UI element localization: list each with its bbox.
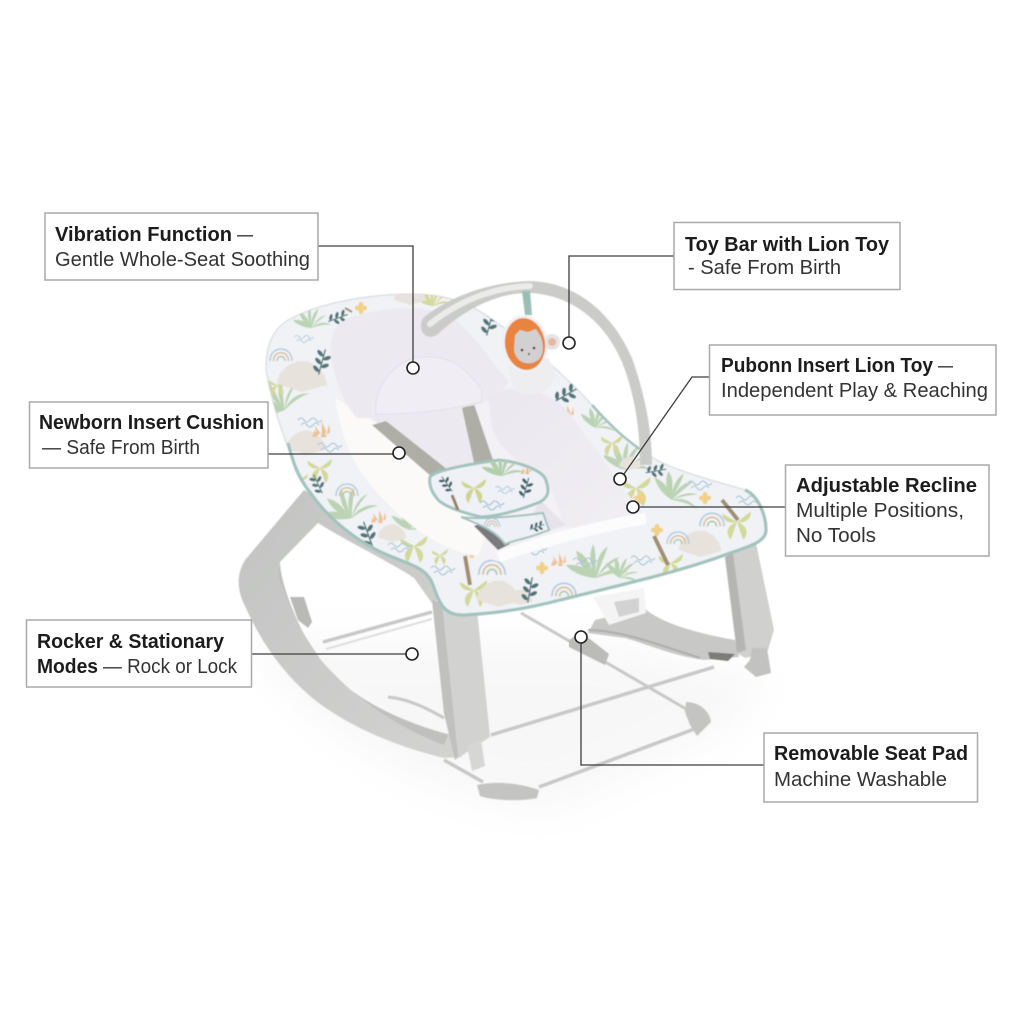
- lion toy: [498, 291, 560, 394]
- leader line: [640, 506, 785, 508]
- box: [30, 402, 268, 468]
- toy hanging strap: [522, 291, 532, 315]
- seat inner shade: [530, 500, 566, 532]
- rocker inner face: [246, 562, 448, 745]
- marker: [614, 473, 626, 485]
- callout: newborn insert cushion: [30, 402, 405, 468]
- label text: Adjustable Recline: [796, 475, 977, 497]
- label text: Toy Bar with Lion Toy: [685, 234, 890, 256]
- marker: [563, 337, 575, 349]
- lion mane: [502, 315, 548, 373]
- description: Multiple Positions,: [796, 500, 964, 522]
- label text: Removable Seat Pad: [774, 743, 968, 765]
- lion eyes and nose: [521, 347, 535, 355]
- label text: Newborn Insert Cushion: [39, 412, 264, 434]
- description: Machine Washable: [774, 769, 947, 791]
- box: [26, 620, 252, 687]
- left side cushion: [335, 398, 486, 556]
- callout: removable seat pad: [575, 631, 978, 802]
- seat white base: [497, 513, 647, 562]
- product: infant rocker seat: [239, 281, 774, 800]
- marker: [407, 362, 419, 374]
- headrest: [331, 308, 509, 418]
- harness strap center: [462, 404, 493, 467]
- newborn insert cushion: [331, 308, 647, 562]
- leader line: [268, 453, 393, 455]
- marker: [627, 501, 639, 513]
- toy bar: [421, 281, 652, 465]
- box: [786, 465, 989, 556]
- crotch pad print: [484, 518, 546, 534]
- marker: [575, 631, 587, 643]
- left rocker: [239, 490, 462, 758]
- bar highlight: [430, 286, 530, 324]
- headrest inner pad: [376, 357, 482, 414]
- leader line: [569, 256, 674, 337]
- callout: adjustable recline: [627, 465, 989, 556]
- front base foot: [477, 783, 539, 800]
- back base foot: [685, 702, 711, 736]
- floor shadow: [250, 640, 770, 809]
- seat pad: [246, 285, 766, 615]
- front foot clip: [467, 740, 485, 771]
- leader line: [624, 377, 709, 474]
- right side cushion: [488, 389, 644, 528]
- fabric binding right edge: [592, 405, 650, 456]
- dash: —: [237, 224, 253, 246]
- description: Independent Play & Reaching: [721, 380, 988, 402]
- fabric binding lower edge: [288, 443, 766, 615]
- description: — Safe From Birth: [42, 437, 200, 459]
- callout: toy bar with lion toy: [563, 222, 900, 349]
- right back rocker: [588, 608, 739, 660]
- marker: [393, 447, 405, 459]
- box: [710, 345, 996, 415]
- base rods: [323, 612, 714, 787]
- description second line: No Tools: [796, 525, 876, 547]
- control box: [593, 588, 646, 625]
- dash: —: [938, 355, 953, 377]
- jungle print: [246, 285, 760, 607]
- label text: Vibration Function: [55, 224, 232, 246]
- rocker frame: [239, 490, 774, 800]
- box: [45, 213, 318, 280]
- lower crotch pad: [461, 513, 549, 544]
- center back panel: [368, 398, 497, 480]
- leader line: [318, 246, 413, 362]
- callout: rocker and stationary modes: [26, 620, 418, 687]
- left rocker brace: [290, 597, 312, 628]
- label text second line: Modes: [37, 656, 98, 678]
- description: - Safe From Birth: [688, 257, 841, 279]
- chest pad: [430, 460, 548, 517]
- description: — Rock or Lock: [103, 656, 238, 678]
- dark gap below pad: [474, 522, 510, 550]
- harness strap left: [372, 421, 448, 478]
- toy paw: [544, 334, 560, 350]
- callout: vibration function: [45, 213, 419, 374]
- fabric base: [266, 294, 766, 615]
- leader line: [251, 653, 406, 655]
- lion face: [514, 329, 543, 363]
- front leg: [432, 600, 490, 760]
- box: [764, 733, 978, 802]
- chest pad print: [438, 460, 534, 511]
- right foot clip: [744, 648, 771, 677]
- plush backing: [498, 312, 552, 376]
- leader line: [581, 643, 764, 765]
- description: Gentle Whole-Seat Soothing: [55, 249, 310, 271]
- box: [674, 222, 900, 290]
- marker: [406, 648, 418, 660]
- callout: pubonn insert lion toy: [614, 345, 996, 485]
- plush body: [508, 358, 556, 394]
- label text: Rocker & Stationary: [37, 631, 225, 653]
- right back leg: [725, 543, 774, 658]
- arched bar: [421, 281, 652, 465]
- liner underlay: [333, 380, 647, 562]
- label text: Pubonn Insert Lion Toy: [721, 355, 934, 377]
